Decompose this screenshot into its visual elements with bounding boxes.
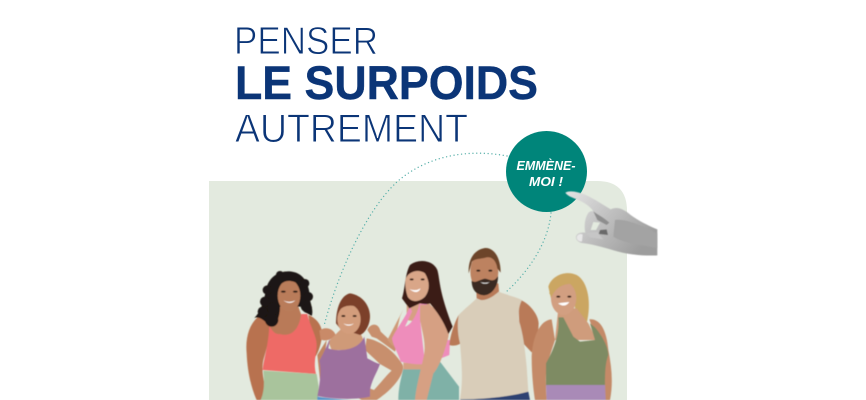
title: LE SURPOIDS [235,56,538,109]
title [234,20,538,151]
icon: pointing hand [565,191,657,256]
button: emmène-moi: EMMÈNE- [516,158,576,173]
people group [246,248,612,400]
title: AUTREMENT [235,107,468,151]
person: woman in coral top [246,271,336,400]
person: woman in pink top [367,261,459,400]
person: woman in olive top [532,273,612,400]
person: man in beige shirt [449,248,539,400]
button: emmène-moi [506,131,587,212]
person: child in purple top [317,293,403,400]
button: emmène-moi: MOI ! [529,174,564,189]
panel: green background [209,181,627,400]
dotted path: arc from button to people [324,153,551,326]
title: PENSER [234,20,378,63]
